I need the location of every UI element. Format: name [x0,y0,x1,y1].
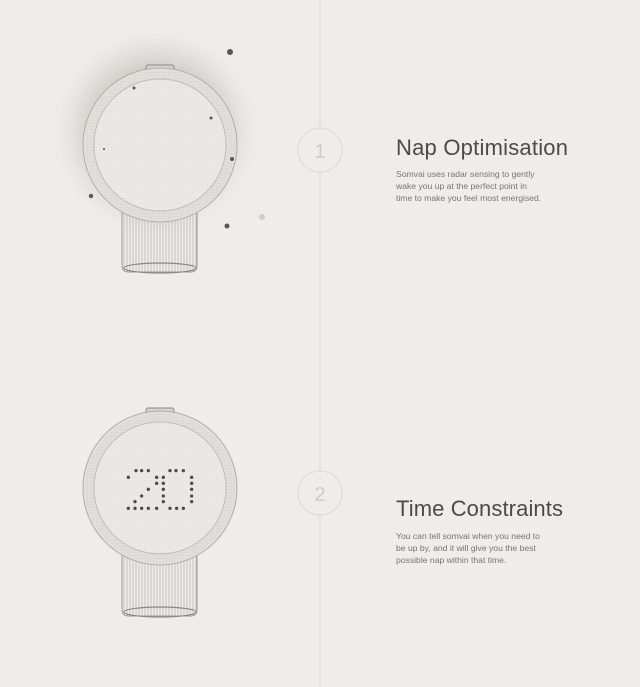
step marker 1 [298,128,342,172]
text: time description: You can tell somvai when you need to [396,531,540,541]
step marker 2: 2 [314,484,326,506]
device 2: lamp with 20 display [83,408,237,617]
text: time description: possible nap within that time. [396,555,506,565]
text: nap description: wake you up at the perfect point in [395,181,527,191]
text: time description: be up by, and it will give you the best [396,543,536,553]
step marker 1: 1 [314,141,326,163]
step marker 2 [298,471,342,515]
radar dots [89,49,265,228]
text: nap description: Somvai uses radar sensing to gently [396,169,535,179]
device 1: radar wireframe lamp [48,24,265,273]
text: nap description: time to make you feel most energised. [396,193,541,203]
dot display: 20 [127,469,193,510]
heading: Nap Optimisation: Nap Optimisation [396,135,568,160]
heading: Time Constraints: Time Constraints [396,496,563,521]
